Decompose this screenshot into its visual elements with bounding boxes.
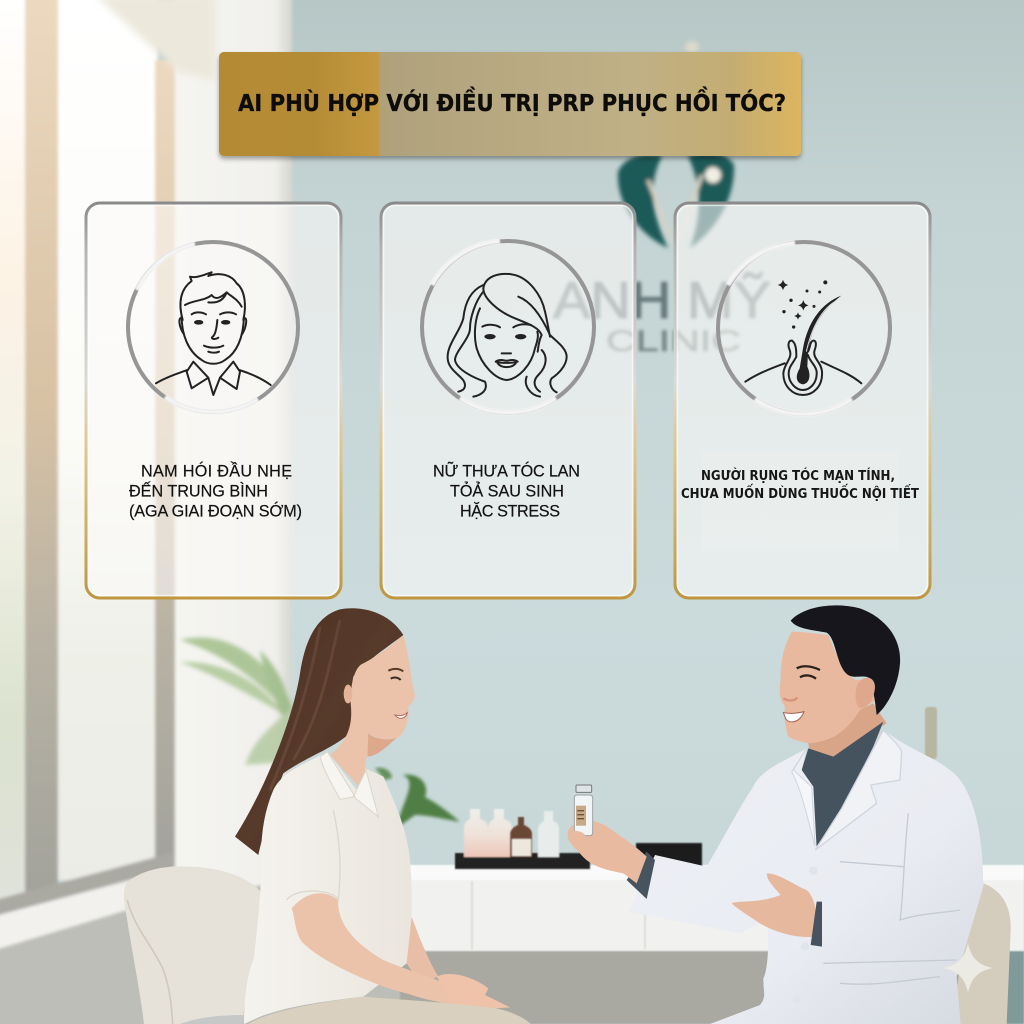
label: nam hói	[129, 462, 302, 520]
label: nữ thưa tóc: HẶC STRESS	[460, 502, 560, 520]
hand holding vial	[568, 820, 647, 883]
label: nam hói: NAM HÓI ĐẦU NHẸ	[141, 462, 292, 480]
clinic logo on wall: CLINIC	[606, 325, 741, 358]
gesturing hand	[732, 873, 816, 937]
cabinet and floor	[400, 707, 1024, 1024]
panel: nữ thưa tóc	[381, 203, 635, 598]
panel: nam hói đầu	[86, 203, 341, 598]
window panes	[0, 0, 430, 1024]
background plant	[180, 638, 460, 828]
label: rụng tóc mạn tính: NGƯỜI RỤNG TÓC MẠN TÍNH,	[701, 466, 895, 484]
panel: rụng tóc mạn tính	[675, 203, 930, 598]
watermark sparkle	[943, 943, 993, 993]
label: nam hói: (AGA GIAI ĐOẠN SỚM)	[129, 502, 302, 520]
label: rụng tóc mạn tính: CHƯA MUỐN DÙNG THUỐC NỘI TIẾT	[681, 482, 920, 502]
doctor chair	[953, 883, 1011, 1024]
vial	[574, 785, 593, 836]
arms and hands	[407, 917, 438, 983]
clinic logo on wall: ANH MỸ	[553, 272, 771, 330]
icon: man portrait in ring	[128, 242, 298, 412]
label: nữ thưa tóc: NỮ THƯA TÓC LAN	[433, 460, 580, 480]
clinic logo on wall	[553, 41, 771, 358]
white coat	[628, 730, 983, 1024]
neck and head	[807, 703, 887, 757]
trousers	[248, 997, 531, 1024]
blouse	[244, 752, 412, 1024]
armchair	[124, 866, 260, 1024]
cuff	[627, 852, 655, 899]
neck and face	[330, 635, 415, 813]
photo: patient woman	[124, 608, 531, 1024]
label: nam hói: ĐẾN TRUNG BÌNH	[129, 482, 268, 500]
skincare bottles on tray	[455, 809, 702, 869]
title text: AI PHÙ HỢP VỚI ĐIỀU TRỊ PRP PHỤC HỒI TÓC?	[238, 86, 786, 117]
label: rụng tóc mạn tính	[681, 466, 920, 502]
label: nữ thưa tóc: TỎẢ SAU SINH	[450, 482, 564, 500]
title banner	[219, 52, 801, 156]
dark shirt	[802, 722, 883, 848]
photo: doctor with vial	[568, 605, 1011, 1024]
icon: hair follicle in ring	[718, 242, 890, 414]
label: nữ thưa tóc	[433, 460, 580, 520]
icon: woman portrait in ring	[422, 241, 594, 413]
long hair	[235, 608, 403, 855]
